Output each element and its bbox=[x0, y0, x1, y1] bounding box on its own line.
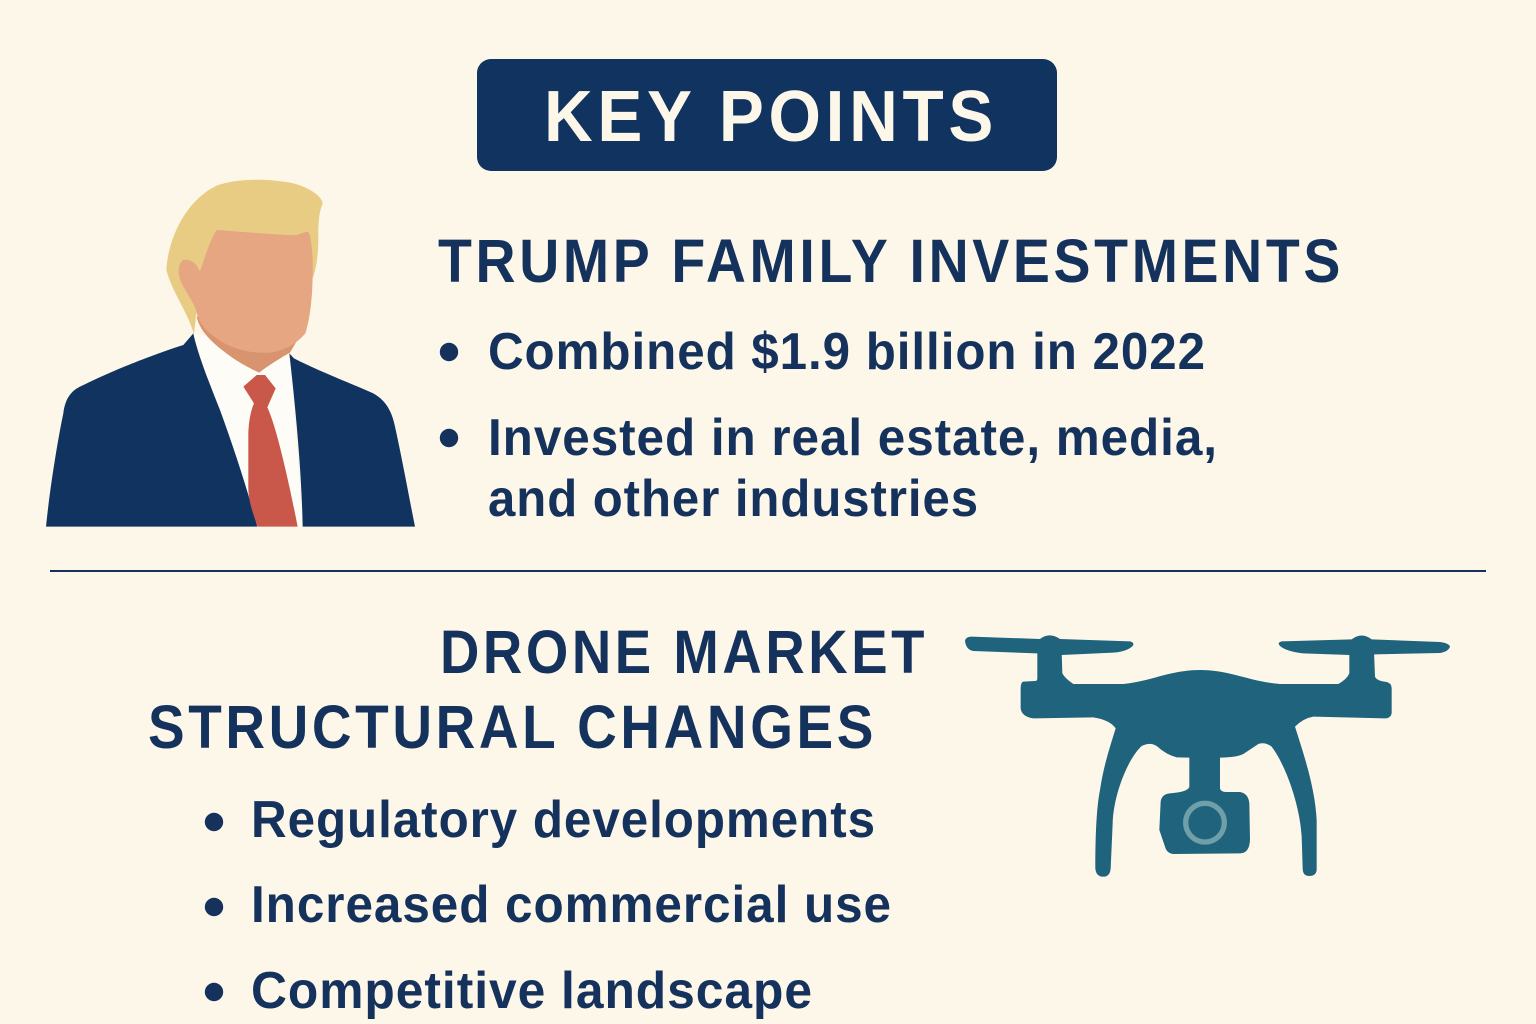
bullet list: Drone market changes: Competitive landscape bbox=[251, 962, 813, 1020]
bullet list: Drone market changes: Regulatory developments bbox=[251, 791, 876, 849]
icon: faceless man in suit bbox=[46, 180, 415, 527]
bullet list: Drone market changes: Increased commercial use bbox=[251, 876, 892, 934]
icon: drone bbox=[965, 635, 1450, 877]
bullet list: Trump family investments: Invested in real estate, media, bbox=[488, 409, 1218, 467]
title badge: KEY POINTS: KEY POINTS bbox=[544, 77, 998, 157]
heading: Trump family investments: TRUMP FAMILY INVESTMENTS bbox=[438, 227, 1344, 295]
bullet list: Trump family investments: and other industries bbox=[488, 470, 979, 528]
bullet list: Drone market changes bbox=[205, 791, 892, 1020]
heading: Drone market structural changes: STRUCTURAL CHANGES bbox=[148, 693, 877, 761]
bullet list: Trump family investments bbox=[440, 323, 1218, 528]
heading: Drone market structural changes bbox=[148, 618, 928, 761]
title badge: KEY POINTS bbox=[477, 59, 1057, 171]
bullet list: Trump family investments: Combined $1.9 billion in 2022 bbox=[488, 323, 1206, 381]
heading: Drone market structural changes: DRONE MARKET bbox=[440, 618, 928, 686]
